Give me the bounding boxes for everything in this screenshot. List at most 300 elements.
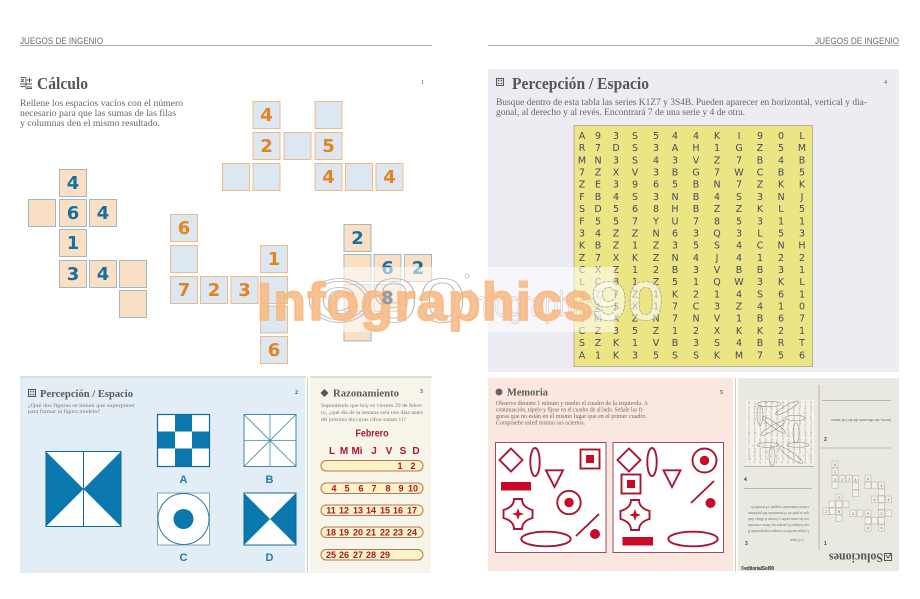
week 2: 5: [344, 484, 350, 494]
letter grid: 5: [799, 168, 805, 178]
instructions: Rellene los espacios vacíos con el número: [20, 98, 183, 109]
week 3: 11: [326, 506, 336, 516]
solution: word grid: C X Z 1 2 B 3 V B B 3 1: [748, 424, 812, 428]
letter grid: V: [714, 265, 721, 276]
letter grid: 6: [653, 180, 659, 191]
solution: explanation text: La figura modelo se consigue superponiendo B: [748, 529, 809, 534]
letter grid: 5: [632, 326, 638, 337]
letter grid: Z: [632, 314, 639, 325]
solution: number crosses: 4: [873, 498, 876, 502]
instructions: [20, 98, 183, 129]
puzzle group: middle cross: 1: [268, 249, 280, 270]
letter grid: K: [672, 289, 679, 300]
watermark outline text: [308, 267, 603, 336]
letter grid: X: [714, 326, 721, 337]
letter grid: K: [736, 326, 743, 337]
letter grid: M: [578, 155, 586, 166]
solution: word grid: S D 5 6 8 H B Z Z K L 5: [748, 440, 812, 444]
letter grid: 4: [736, 253, 742, 264]
week 2: [321, 483, 423, 494]
week 3: 12: [339, 506, 349, 516]
letter grid: B: [672, 168, 678, 178]
week 5: 25: [326, 550, 336, 560]
icon: math symbols: [20, 77, 32, 90]
solution: explanation text: [747, 505, 809, 543]
heading: Percepción / Espacio: [512, 74, 649, 93]
week 1: 2: [410, 461, 416, 471]
letter grid: 4: [736, 338, 742, 349]
puzzle group: left cross: 4: [67, 173, 79, 194]
letter grid: Z: [579, 180, 586, 191]
letter grid: C: [579, 326, 586, 337]
solution: number crosses: 3: [834, 478, 836, 482]
letter grid: K: [799, 180, 806, 191]
instructions: Observe durante 1 minuto y medio el cuadro de la izquierda. A: [496, 401, 649, 407]
letter grid: 4: [613, 192, 619, 203]
letter grid: 9: [757, 131, 763, 142]
page number: 3: [420, 389, 423, 395]
letter grid: F: [579, 216, 585, 227]
page number: 5: [720, 390, 723, 396]
letter grid: G: [692, 168, 700, 178]
puzzle group: right cross: 2: [412, 258, 424, 279]
letter grid: 4: [757, 302, 763, 312]
letter grid: F: [579, 192, 585, 203]
letter grid: V: [714, 314, 721, 325]
solution numbers: [744, 437, 827, 547]
letter grid: 3: [757, 216, 763, 227]
letter grid: C: [757, 168, 764, 178]
solution: number crosses: 4: [854, 478, 857, 482]
letter grid: K: [613, 350, 620, 361]
heading: Percepción / Espacio: [40, 388, 133, 400]
week 3: 14: [366, 506, 376, 516]
letter grid: L: [778, 204, 784, 215]
letter grid: D: [612, 143, 620, 154]
letter grid: L: [799, 277, 805, 288]
solution: number crosses: 1: [834, 470, 836, 474]
puzzle group: middle cross: 6: [178, 218, 190, 239]
letter grid: Z: [595, 338, 602, 349]
solution: number crosses: [823, 461, 892, 531]
puzzle group: left cross: 1: [67, 233, 79, 254]
week 3: 15: [380, 506, 390, 516]
letter grid: N: [671, 253, 679, 264]
letter grid: Z: [714, 155, 721, 166]
letter grid: 2: [799, 253, 805, 264]
instructions: gonal, al derecho y al revés. Encontrará 7 de una serie y 4 de otra.: [496, 108, 745, 118]
week 5: 27: [353, 550, 363, 560]
letter grid: N: [777, 241, 785, 252]
solution: number crosses: 4: [887, 498, 890, 502]
figure: option D: [244, 493, 296, 545]
week 5: 29: [380, 550, 390, 560]
solution: number crosses: 4: [880, 484, 883, 488]
letter grid: K: [757, 204, 764, 215]
letter grid: Z: [736, 302, 743, 312]
letter grid: Z: [653, 277, 660, 288]
letter grid: 2: [778, 326, 784, 337]
letter grid: 6: [632, 204, 638, 215]
question: ¿Qué dos figuras se tienen que superponer: [28, 402, 135, 409]
letter grid: B: [672, 265, 678, 276]
question: [321, 402, 423, 423]
letter grid: B: [693, 180, 699, 191]
week 5: 26: [339, 550, 349, 560]
letter grid: 5: [672, 277, 678, 288]
weekday row: V: [386, 446, 393, 457]
letter grid: 7: [672, 302, 678, 312]
cell digit 8 showing through: 8: [381, 288, 394, 309]
week 2: 4: [331, 484, 337, 494]
solution: explanation text: C y D figuras: [790, 538, 804, 543]
letter grid: B: [595, 241, 601, 252]
solution: word grid: L C B 1 Z 5 1 Q W 3 K L: [748, 420, 812, 424]
puzzle group: top cross: 5: [322, 136, 335, 157]
solution: number crosses: 4: [880, 526, 883, 530]
letter grid: 5: [778, 228, 784, 239]
solution: number crosses: 5: [867, 512, 869, 516]
letter grid: 5: [613, 204, 619, 215]
solution: reasoning text: Jueves, dos días antes del día 2 de marzo: [831, 417, 891, 422]
instructions: [496, 98, 867, 118]
letter grid: V: [632, 168, 639, 178]
puzzle group: right cross: 6: [381, 258, 394, 279]
letter grid: X: [595, 265, 602, 276]
puzzle group: left cross: 6: [67, 203, 79, 224]
letter grid: 4: [693, 131, 699, 142]
week 4: 18: [326, 528, 336, 538]
puzzle group: right cross: [344, 224, 432, 341]
week 4: 20: [353, 528, 363, 538]
letter grid: 1: [778, 302, 784, 312]
letter grid: 5: [672, 180, 678, 191]
letter grid: L: [579, 277, 585, 288]
puzzle group: middle cross: 7: [178, 280, 190, 301]
week 2: 6: [358, 484, 364, 494]
week 4: 23: [393, 528, 403, 538]
solution: word grid: M N 3 S 4 3 V Z 7 B 4 B: [748, 453, 812, 457]
letter grid: 5: [778, 350, 784, 361]
week 3: 13: [353, 506, 363, 516]
letter grid: W: [734, 277, 744, 288]
instructions: guras que no están en el mismo lugar que en el primer cuadro.: [496, 414, 647, 420]
letter grid: R: [579, 143, 586, 154]
letter grid: 7: [799, 314, 805, 325]
letter grid: H: [671, 204, 679, 215]
letter grid: 5: [778, 143, 784, 154]
panel: Percepción / Espacio word search: [488, 69, 899, 372]
puzzle group: top cross: 4: [260, 105, 273, 126]
letter grid: N: [671, 192, 679, 203]
letter grid: 7: [757, 350, 763, 361]
letter grid: B: [757, 265, 763, 276]
letter grid: 3: [736, 228, 742, 239]
solution numbers: 2: [824, 437, 827, 443]
calendar: [321, 428, 423, 560]
instructions: [496, 401, 649, 426]
panel: Soluciones (upside down): [738, 378, 899, 572]
option labels: D: [266, 552, 274, 564]
watermark: Infographics90: [257, 267, 664, 336]
question: del próximo día cuyas cifras suman 11?: [321, 416, 407, 423]
week 5: [321, 550, 423, 560]
instructions: Busque dentro de esta tabla las series K1Z7 y 3S4B. Pueden aparecer en horizontal, vertical y dia-: [496, 98, 867, 108]
letter grid: S: [632, 143, 638, 154]
letter grid: 7: [595, 143, 601, 154]
letter grid: 8: [653, 204, 659, 215]
letter grid: Z: [613, 265, 620, 276]
letter grid: 1: [799, 289, 805, 300]
solution: explanation text: con la figura D, porque sus líneas coinciden: [748, 522, 809, 528]
icon: check box: [884, 554, 892, 560]
letter grid: B: [757, 338, 763, 349]
week 2: 10: [408, 484, 418, 494]
icon: dice square: [496, 78, 504, 86]
letter grid: Z: [653, 326, 660, 337]
watermark 90: 90: [591, 270, 664, 332]
puzzle group: middle cross: [170, 214, 288, 364]
solution: number crosses: 6: [838, 510, 841, 514]
solution: word grid: Z 7 X K Z N 4 J 4 1 2 2: [748, 427, 812, 431]
letter grid: S: [579, 204, 585, 215]
letter grid: B: [693, 192, 699, 203]
solution: number crosses: 4: [867, 526, 870, 530]
letter grid: 7: [595, 253, 601, 264]
letter grid: 0: [799, 302, 805, 312]
letter grid: N: [594, 155, 602, 166]
week 4: [321, 527, 423, 538]
letter grid: 7: [736, 155, 742, 166]
week 1: [321, 460, 423, 471]
letter grid: 7: [632, 216, 638, 227]
letter grid: J: [715, 253, 718, 264]
letter grid: 3: [757, 277, 763, 288]
solution: number crosses: 2: [838, 496, 840, 500]
solution: word grid: 3 4 Z Z N 6 3 Q 3 L 5 3: [748, 434, 812, 438]
letter grid: 1: [799, 265, 805, 276]
letter grid: 3: [613, 180, 619, 191]
letter grid: 6: [778, 289, 784, 300]
letter grid: 1: [653, 302, 659, 312]
letter grid: X: [632, 302, 639, 312]
option labels: B: [266, 474, 274, 486]
week 2: 7: [371, 484, 377, 494]
title: Cálculo: Cálculo: [37, 74, 88, 93]
icon: dot: [496, 388, 502, 396]
letter grid: Z: [757, 180, 764, 191]
letter grid: B: [613, 277, 619, 288]
letter grid: 5: [799, 204, 805, 215]
solution: number crosses: 2: [841, 478, 843, 482]
letter grid: Z: [653, 253, 660, 264]
letter grid: K: [632, 253, 639, 264]
heading: Razonamiento: [333, 388, 399, 400]
credit: ©editorialSol90: [741, 565, 774, 572]
letter grid: 4: [778, 155, 784, 166]
week 2: 9: [398, 484, 404, 494]
letter grid: 7: [579, 168, 585, 178]
letter grid: G: [735, 143, 743, 154]
week 4: 22: [380, 528, 390, 538]
letter grid: S: [693, 350, 699, 361]
solution: number crosses: 6: [834, 463, 837, 467]
letter grid: L: [799, 131, 805, 142]
letter grid: 3: [693, 228, 699, 239]
letter grid: S: [613, 302, 619, 312]
letter grid: 7: [736, 180, 742, 191]
letter grid: 3: [672, 241, 678, 252]
letter grid: 3: [693, 265, 699, 276]
letter grid: 5: [613, 216, 619, 227]
solution: word grid: F B 4 S 3 N B 4 S 3 N J: [748, 444, 812, 448]
letter grid: J: [800, 192, 803, 203]
week 3: [321, 505, 423, 516]
letter grid: S: [714, 338, 720, 349]
letter grid: N: [652, 314, 660, 325]
letter grid: 7: [613, 289, 619, 300]
letter grid: 1: [736, 314, 742, 325]
letter grid: Z: [632, 228, 639, 239]
letter grid: 8: [714, 216, 720, 227]
letter grid: 5: [653, 131, 659, 142]
page number: 1: [421, 80, 424, 86]
week 4: 19: [339, 528, 349, 538]
letter grid: Z: [595, 289, 602, 300]
letter grid: V: [693, 155, 700, 166]
letter grid: Q: [713, 277, 721, 288]
figure: option B: [244, 414, 296, 466]
instructions: y columnas den el mismo resultado.: [20, 118, 160, 129]
letter grid: X: [579, 289, 586, 300]
solution: word grid: F 5 5 7 Y U 7 8 5 3 1 1: [748, 437, 812, 441]
page number: 4: [884, 80, 887, 86]
week 1: 1: [397, 461, 403, 471]
letter grid: B: [757, 155, 763, 166]
puzzle group: top cross: 4: [322, 167, 335, 188]
panel: Cálculo heading: [20, 74, 424, 129]
solution: number crosses: 4: [852, 512, 855, 516]
letter grid: Z: [613, 228, 620, 239]
letter grid: 2: [653, 265, 659, 276]
puzzle group: left cross: 4: [97, 264, 109, 285]
puzzle group: middle cross: 6: [268, 340, 280, 361]
week 2: 8: [385, 484, 391, 494]
letter grid: S: [672, 350, 678, 361]
instructions: necesario para que las sumas de las filas: [20, 108, 176, 119]
letter grid: 3: [757, 192, 763, 203]
watermark outline text: ©90: [308, 267, 466, 336]
solution numbers: 4: [744, 477, 747, 483]
letter grid: X: [613, 253, 620, 264]
letter grid: I: [738, 131, 740, 142]
letter grid: T: [798, 338, 805, 349]
letter grid: 1: [714, 143, 720, 154]
letter grid: 2: [693, 289, 699, 300]
letter grid: N: [692, 314, 700, 325]
week 4: 24: [407, 528, 417, 538]
letter grid: E: [595, 180, 601, 191]
solution numbers: 3: [745, 541, 748, 547]
letter grid: 2: [693, 326, 699, 337]
solution: word grid: R 7 D S 3 A H 1 G Z 5 M: [748, 457, 812, 461]
solution: explanation text: que se pide en el enunciado del problema: [748, 511, 809, 516]
letter grid: B: [757, 314, 763, 325]
letter grid: 3: [778, 265, 784, 276]
letter grid: A: [579, 131, 586, 142]
letter grid: H: [692, 143, 700, 154]
letter grid: K: [714, 350, 721, 361]
panel: Memoria: [488, 378, 733, 571]
letter grid: V: [653, 338, 660, 349]
puzzle group: left cross: 3: [67, 264, 79, 285]
letter grid: K: [613, 338, 620, 349]
letter grid: C: [693, 302, 700, 312]
letter grid: K: [714, 131, 721, 142]
letter grid: 2: [595, 302, 601, 312]
letter grid: K: [778, 277, 785, 288]
letter grid: 7: [579, 302, 585, 312]
left memory board: [496, 442, 606, 552]
letter grid: 4: [714, 192, 720, 203]
question: para formar la figura modelo?: [28, 408, 101, 415]
letter grid: K: [778, 180, 785, 191]
puzzle group: middle cross: 2: [208, 280, 220, 301]
week 3: 16: [393, 506, 403, 516]
letter grid: B: [799, 155, 805, 166]
letter grid: 3: [693, 338, 699, 349]
letter grid: N: [713, 180, 721, 191]
instructions: continuación, tápelo y fíjese en el cuadro de al lado. Señale las fi-: [496, 406, 644, 414]
letter grid: W: [734, 168, 744, 178]
weekday row: M: [340, 446, 348, 457]
letter grid: 1: [632, 241, 638, 252]
letter grid: 2: [778, 253, 784, 264]
panel: Razonamiento: [310, 378, 431, 573]
letter grid: 4: [736, 289, 742, 300]
option labels: A: [180, 474, 188, 486]
letter grid: 1: [693, 277, 699, 288]
letter grid: 3: [632, 350, 638, 361]
letter grid: 3: [653, 143, 659, 154]
week 4: 21: [366, 528, 376, 538]
solution: explanation text: correctamente según el modelo: [751, 505, 809, 510]
puzzle group: right cross: 2: [351, 228, 364, 249]
letter grid: 3: [653, 192, 659, 203]
letter grid: 3: [714, 302, 720, 312]
letter grid: 1: [632, 265, 638, 276]
letter grid: Z: [595, 326, 602, 337]
puzzle group: top cross: [222, 102, 403, 190]
letter grid: B: [736, 265, 742, 276]
solution: word grid: A 9 3 S 5 4 4 K I 9 0 L: [748, 460, 812, 464]
letter grid: 4: [653, 155, 659, 166]
letter grid: N: [777, 192, 785, 203]
letter grid: K: [757, 326, 764, 337]
letter grid: D: [594, 204, 602, 215]
watermark outline text: infographics: [468, 283, 603, 324]
watermark main text: Infographics: [257, 273, 593, 332]
letter grid: C: [579, 265, 586, 276]
puzzle group: left cross: 4: [97, 203, 109, 224]
solution numbers: 1: [824, 541, 827, 547]
figure: option A: [158, 414, 210, 466]
puzzle group: top cross: 4: [383, 167, 396, 188]
panel: Percepción / Espacio figures: [20, 378, 305, 573]
letter grid: X: [613, 314, 620, 325]
weekday row: S: [400, 446, 407, 457]
question: Suponiendo que hoy es viernes 29 de febre-: [321, 402, 423, 409]
